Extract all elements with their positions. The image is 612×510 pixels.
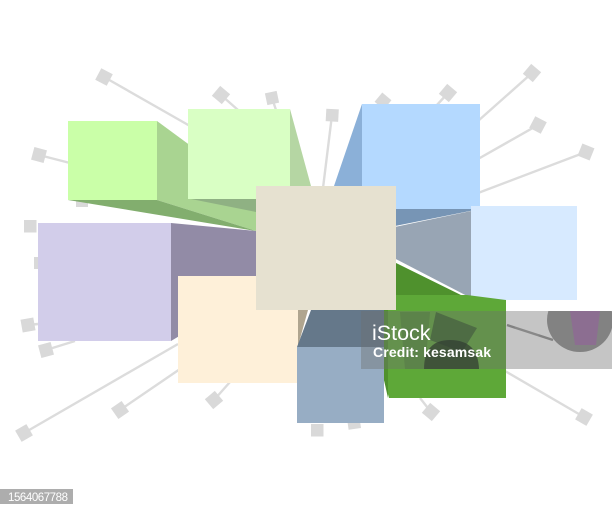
panel: cream box (lower left)	[178, 276, 298, 383]
connector lines and square nodes	[15, 64, 594, 442]
panel: pale green box (top)	[188, 109, 311, 212]
image id tag	[0, 489, 73, 504]
image id tag: 1564067788	[8, 492, 68, 504]
panel: pale blue box (right)	[390, 206, 577, 300]
watermark band	[361, 311, 612, 369]
panel: light blue box (top right)	[334, 104, 480, 227]
watermark credit: Credit: kesamsak	[373, 344, 491, 360]
panel: central beige box	[256, 186, 396, 310]
watermark logo: iStock	[372, 321, 431, 345]
panel: green box (lower right)	[354, 261, 506, 398]
panel: lavender box (left)	[38, 223, 256, 341]
panel: slate box (bottom)	[297, 310, 384, 423]
panel: green box (upper left)	[68, 121, 256, 231]
